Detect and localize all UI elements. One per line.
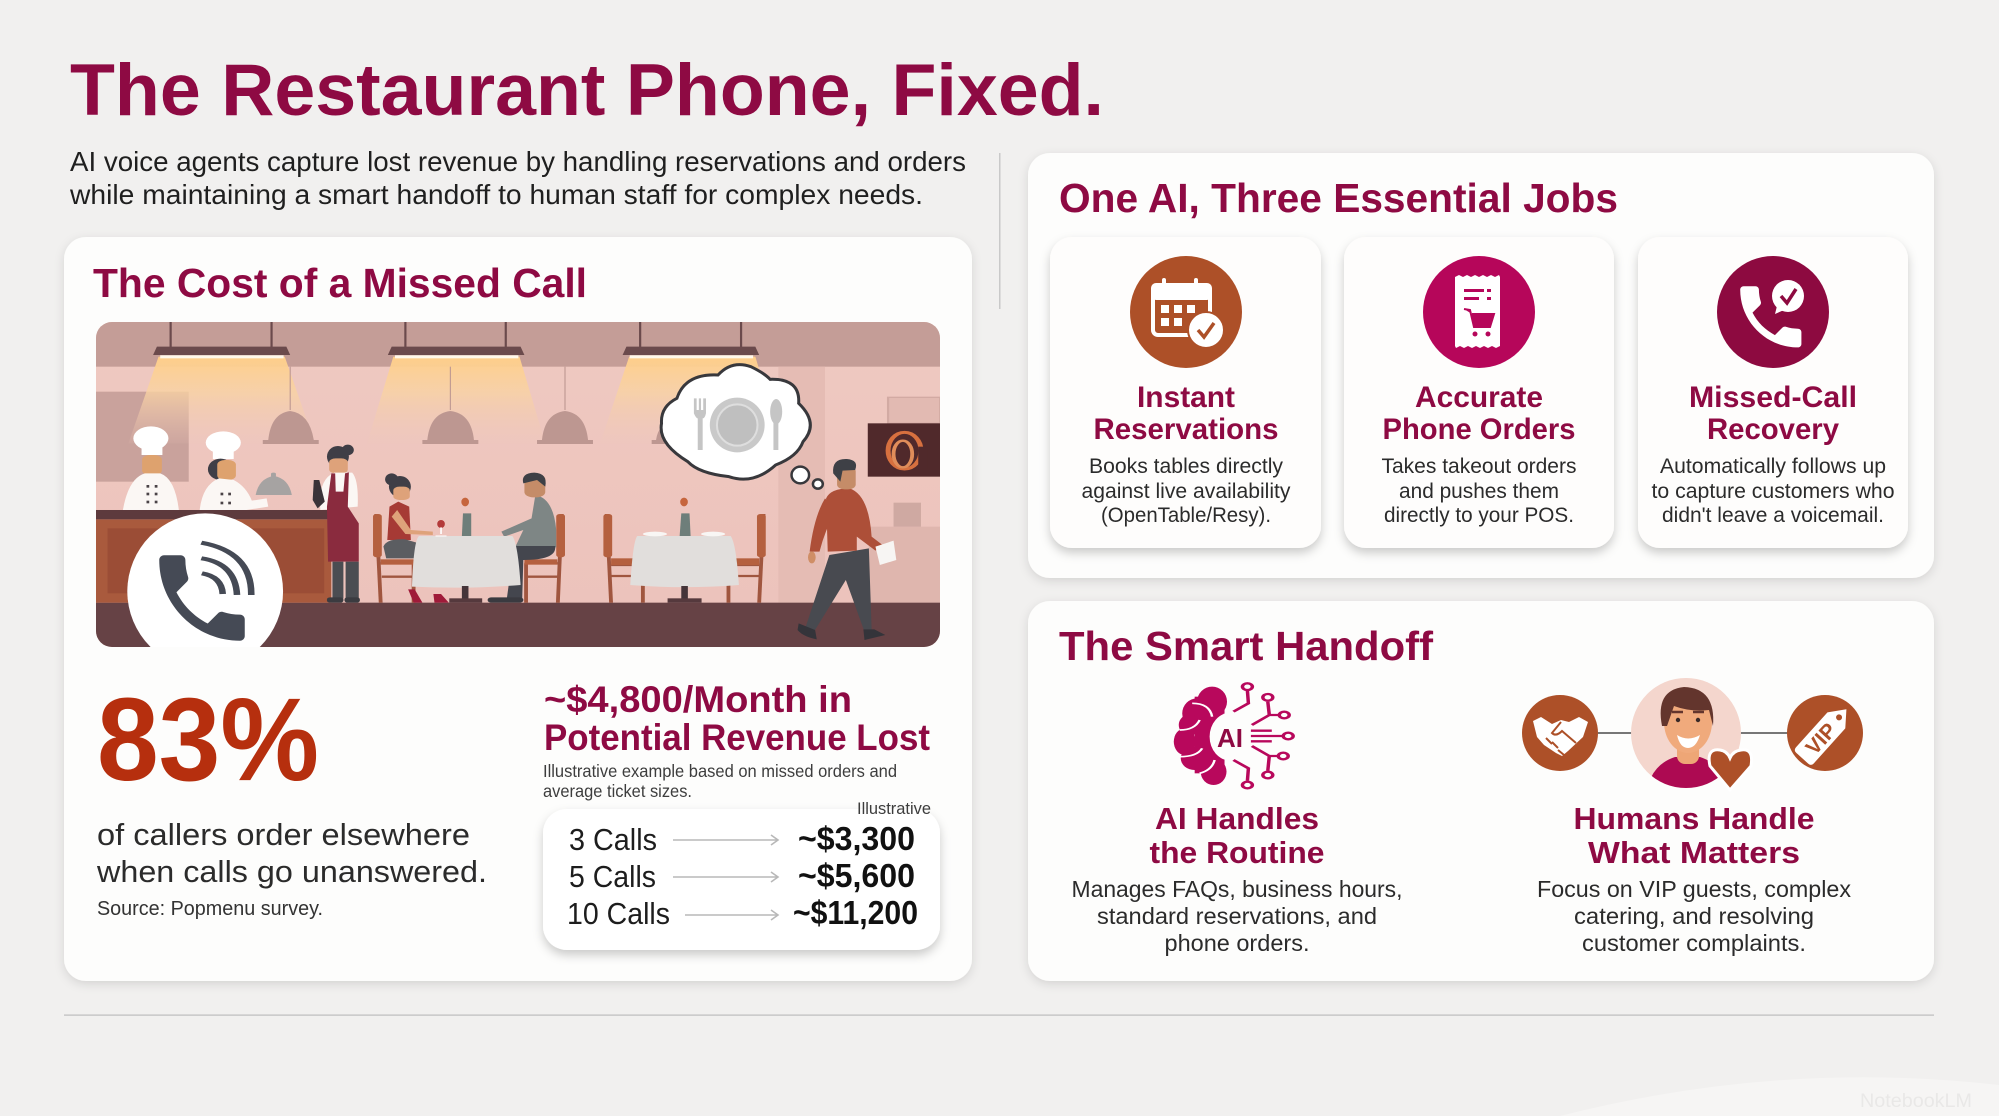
card text: and pushes them [1399, 479, 1559, 503]
card title: Instant [1137, 381, 1235, 414]
card text: (OpenTable/Resy). [1101, 503, 1271, 527]
row: 5 calls: 5 Calls [569, 859, 656, 894]
icon: handshake [1522, 695, 1598, 771]
card title: Accurate [1415, 381, 1543, 414]
thought bubble with plate, fork and spoon [661, 365, 823, 489]
connector lines [1598, 732, 1788, 734]
card title [1382, 381, 1576, 446]
card text [1082, 454, 1291, 527]
heading: smart handoff: The Smart Handoff [1059, 623, 1433, 669]
icon: AI brain with circuits: AI [1217, 723, 1243, 753]
card title: Phone Orders [1382, 413, 1576, 446]
heading: revenue lost: Potential Revenue Lost [544, 717, 930, 758]
row: 3 calls [569, 820, 915, 857]
subtitle [69, 146, 966, 210]
waitress [313, 445, 360, 603]
row: 10 calls [567, 894, 918, 931]
floor [95, 603, 940, 647]
icon: VIP tag: VIP [1802, 719, 1841, 759]
row: 5 calls [569, 857, 915, 894]
source note: Source: Popmenu survey. [97, 898, 323, 920]
title: The Restaurant Phone, Fixed. [70, 50, 1104, 131]
chefs [123, 426, 292, 510]
table label: Illustrative [857, 800, 931, 818]
column: humans handle what matters [1537, 801, 1851, 956]
row: 10 calls: ~$11,200 [793, 894, 918, 931]
column: AI handles the routine: the Routine [1150, 835, 1324, 870]
row: 10 calls: 10 Calls [567, 896, 670, 931]
card text: Books tables directly [1089, 454, 1283, 478]
card: missed-call recovery [1638, 237, 1908, 548]
icon: calendar with check [1130, 256, 1242, 368]
column: AI handles the routine [1072, 801, 1402, 956]
column: humans handle what matters: What Matters [1588, 835, 1800, 870]
card text: directly to your POS. [1384, 503, 1574, 527]
card: instant reservations [1050, 237, 1321, 548]
table: calls to revenue [543, 800, 940, 950]
card text: to capture customers who [1652, 479, 1895, 503]
column: humans handle what matters: Focus on VIP guests, complex [1537, 876, 1851, 902]
panel: one AI, three essential jobs [1028, 153, 1934, 578]
card title: Reservations [1094, 413, 1278, 446]
card: accurate phone orders [1344, 237, 1614, 548]
watermark: NotebookLM [1860, 1091, 1972, 1112]
card text: Takes takeout orders [1382, 454, 1576, 478]
card text: didn't leave a voicemail. [1662, 503, 1884, 527]
heading: three essential jobs: One AI, Three Essential Jobs [1059, 175, 1618, 221]
icon: VIP tag [1787, 695, 1863, 771]
card title [1689, 381, 1857, 446]
icon: phone with signal waves in white circle [127, 513, 284, 647]
revenue note [543, 761, 897, 801]
row: 5 calls: ~$5,600 [798, 857, 915, 894]
column: humans handle what matters: customer complaints. [1582, 930, 1806, 956]
column: humans handle what matters: Humans Handle [1574, 801, 1814, 836]
card text [1652, 454, 1895, 527]
row: 3 calls: 3 Calls [569, 822, 657, 857]
card title: Recovery [1707, 413, 1839, 446]
statistic description: of callers order elsewhere [97, 817, 470, 852]
statistic: 83 percent: 83% [97, 674, 319, 806]
card text: Automatically follows up [1660, 454, 1886, 478]
heading: revenue lost [544, 679, 930, 758]
illustration: restaurant scene with unanswered phone [95, 322, 940, 669]
subtitle: while maintaining a smart handoff to human staff for complex needs. [69, 179, 923, 210]
column: AI handles the routine: Manages FAQs, business hours, [1072, 876, 1402, 902]
card text [1382, 454, 1576, 527]
column: AI handles the routine: AI Handles [1155, 801, 1319, 836]
column: AI handles the routine: phone orders. [1164, 930, 1310, 956]
panel: the smart handoff [1028, 601, 1934, 981]
statistic description: when calls go unanswered. [96, 854, 487, 889]
card title: Missed-Call [1689, 381, 1857, 414]
revenue note: Illustrative example based on missed orders and [543, 761, 897, 781]
statistic description [96, 817, 487, 889]
walking customer [798, 459, 896, 640]
heading: cost of a missed call: The Cost of a Missed Call [93, 260, 587, 306]
row: 3 calls: ~$3,300 [798, 820, 915, 857]
card text: against live availability [1082, 479, 1291, 503]
subtitle: AI voice agents capture lost revenue by handling reservations and orders [70, 146, 966, 177]
diners and tables [373, 473, 766, 603]
revenue note: average ticket sizes. [543, 781, 692, 801]
wall sign [868, 423, 940, 477]
heading: revenue lost: ~$4,800/Month in [544, 679, 852, 720]
icon: receipt with cart [1423, 256, 1535, 368]
counter [95, 510, 331, 603]
icon: smiling staff member with heart [1631, 678, 1752, 795]
icon: phone with check bubble [1717, 256, 1829, 368]
column: AI handles the routine: standard reservations, and [1097, 903, 1377, 929]
icon: AI brain with circuits [1174, 683, 1293, 788]
column: humans handle what matters: catering, and resolving [1574, 903, 1814, 929]
card title [1094, 381, 1278, 446]
